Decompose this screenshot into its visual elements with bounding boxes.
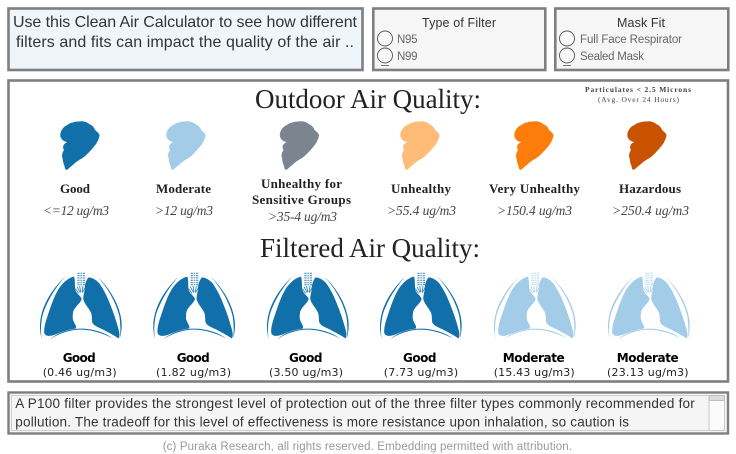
note: particulates [585,85,691,104]
outdoor level: very unhealthy: >150.4 ug/m3 [497,203,572,218]
filtered result 6: (23.13 ug/m3) [607,366,688,379]
filtered result 4 [380,273,462,379]
intro text: filters and fits can impact the quality of the air .. [16,34,354,51]
option: full face respirator [560,31,682,46]
panel: mask fit selector [555,8,728,70]
option: N95 [378,31,418,46]
filtered result 4: Good [403,351,436,365]
filtered result 2 [153,273,235,379]
panel: type of filter selector [373,8,545,70]
outdoor level: hazardous [612,122,689,218]
heading: mask fit: Mask Fit [617,16,666,30]
panel: intro message [8,8,362,70]
outdoor level: moderate [155,122,213,218]
description text: A P100 filter provides the strongest level of protection out of the three filter types commonly recommended for [15,396,695,411]
outdoor level: very unhealthy: Very Unhealthy [489,181,580,196]
note: particulates: (Avg. Over 24 Hours) [598,95,680,104]
outdoor level: unhealthy: Unhealthy [391,181,452,196]
outdoor level: unhealthy: >55.4 ug/m3 [387,203,456,218]
outdoor level: unhealthy for sensitive groups [252,122,351,224]
filtered result 5: (15.43 ug/m3) [494,366,575,379]
filtered result 1: (0.46 ug/m3) [43,366,117,379]
panel: filter description [8,392,728,434]
filtered result 2: Good [177,351,210,365]
filtered result 6: Moderate [617,351,679,365]
outdoor level: unhealthy [387,122,456,218]
outdoor level: hazardous: Hazardous [619,181,681,196]
outdoor level: moderate: Moderate [156,181,211,196]
option: full face respirator: Full Face Respirator [580,34,682,46]
filtered result 5 [494,273,576,379]
filtered result 1 [40,273,122,379]
filtered result 4: (7.73 ug/m3) [384,366,458,379]
filtered result 1: Good [63,351,96,365]
option: sealed mask: Sealed Mask [580,51,644,63]
outdoor level: good: <=12 ug/m3 [43,203,109,218]
outdoor level: good [43,122,109,218]
option: sealed mask [560,48,644,63]
option: N95: N95 [397,34,418,46]
heading: type of filter: Type of Filter [422,16,496,30]
outdoor level: hazardous: >250.4 ug/m3 [612,203,689,218]
filtered result 5: Moderate [503,351,565,365]
outdoor level: unhealthy for sensitive groups: Sensitive Groups [252,192,351,207]
outdoor level: moderate: >12 ug/m3 [155,203,213,218]
outdoor level: very unhealthy [489,122,580,218]
outdoor level: unhealthy for sensitive groups: >35-4 ug/m3 [268,209,337,224]
scrollbar [709,396,724,430]
heading: outdoor air quality: Outdoor Air Quality: [255,84,481,114]
outdoor level: good: Good [60,181,91,196]
filtered result 3: (3.50 ug/m3) [269,366,343,379]
filtered result 2: (1.82 ug/m3) [156,366,231,379]
panel: air quality [8,80,728,382]
filtered result 6 [607,273,690,379]
option: N99 [378,48,418,63]
option: N99: N99 [397,51,418,63]
intro text: Use this Clean Air Calculator to see how different [13,14,358,31]
heading: filtered air quality: Filtered Air Quality: [260,233,480,263]
filtered result 3: Good [289,351,322,365]
outdoor level: unhealthy for sensitive groups: Unhealthy for [261,176,342,191]
description text: pollution. The tradeoff for this level of effectiveness is more resistance upon inhalation, so caution is [15,414,629,430]
footer credit: (c) Puraka Research, all rights reserved. Embedding permitted with attribution. [163,441,572,453]
filtered result 3 [267,273,349,379]
note: particulates: Particulates < 2.5 Microns [585,85,691,94]
